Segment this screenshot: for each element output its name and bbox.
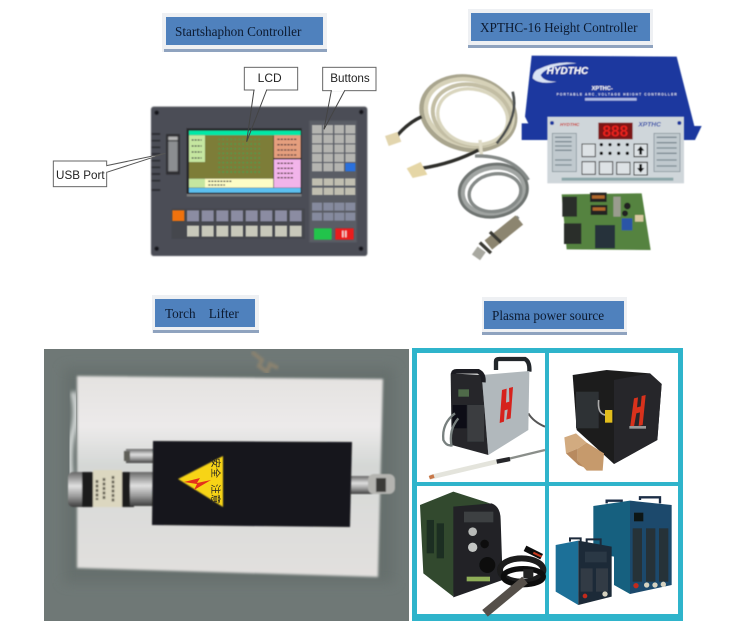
heading: Torch Lifter xyxy=(152,295,259,333)
callout: LCD xyxy=(244,67,298,142)
black box xyxy=(152,441,352,527)
heading: XPTHC-16 Height Controller: XPTHC-16 Height Controller xyxy=(480,20,638,35)
photo: black Hypertherm power source xyxy=(564,370,662,471)
panel: plasma power sources xyxy=(412,348,683,621)
callout: Buttons: Buttons xyxy=(330,72,370,85)
heading: Startshaphon Controller: Startshaphon Controller xyxy=(175,24,302,39)
blue controller box: XPTHC- xyxy=(592,86,613,92)
photo: torch lifter xyxy=(44,349,409,621)
callout: USB Port: USB Port xyxy=(56,169,105,182)
front panel: 888 xyxy=(603,124,629,141)
heading: Torch Lifter: Torch Lifter xyxy=(165,306,239,321)
photo: blue power sources xyxy=(556,497,672,605)
gray sensor cable and proximity sensor xyxy=(456,156,531,257)
blue controller box xyxy=(522,56,702,140)
heading: XPTHC-16 Height Controller xyxy=(468,9,653,48)
heading: Plasma power source: Plasma power source xyxy=(492,308,604,323)
motor cylinder with label xyxy=(68,470,154,507)
cable connectors xyxy=(385,132,427,178)
right shaft and clamp xyxy=(350,474,395,494)
warning label: 注意 xyxy=(209,484,222,504)
blue controller box: PORTABLE ARC_VOLTAGE HEIGHT CONTROLLER xyxy=(557,93,677,97)
beige cable coil xyxy=(395,67,523,168)
connector xyxy=(124,449,154,463)
warning label: 安全 xyxy=(209,458,222,478)
front panel xyxy=(547,117,684,183)
blue controller box: HYDTHC xyxy=(547,66,589,77)
front panel: HYDTHC xyxy=(560,122,580,127)
photo: XPTHC-16 height controller kit xyxy=(385,56,702,257)
front panel: XPTHC xyxy=(637,122,661,129)
LCD screen xyxy=(187,128,302,197)
photo: green Victor power source xyxy=(420,492,543,613)
photo: gray Hypertherm power source xyxy=(429,359,545,478)
warning label xyxy=(178,456,223,507)
callout: LCD: LCD xyxy=(258,71,282,85)
callout: USB Port xyxy=(53,153,165,187)
white foam pad xyxy=(77,376,383,577)
keypad buttons xyxy=(172,125,355,240)
photo: Startshaphon controller panel xyxy=(151,107,367,256)
heading: Plasma power source xyxy=(482,297,627,335)
heading: Startshaphon Controller xyxy=(162,13,327,52)
callout: Buttons xyxy=(323,67,376,129)
circuit board xyxy=(562,193,651,250)
